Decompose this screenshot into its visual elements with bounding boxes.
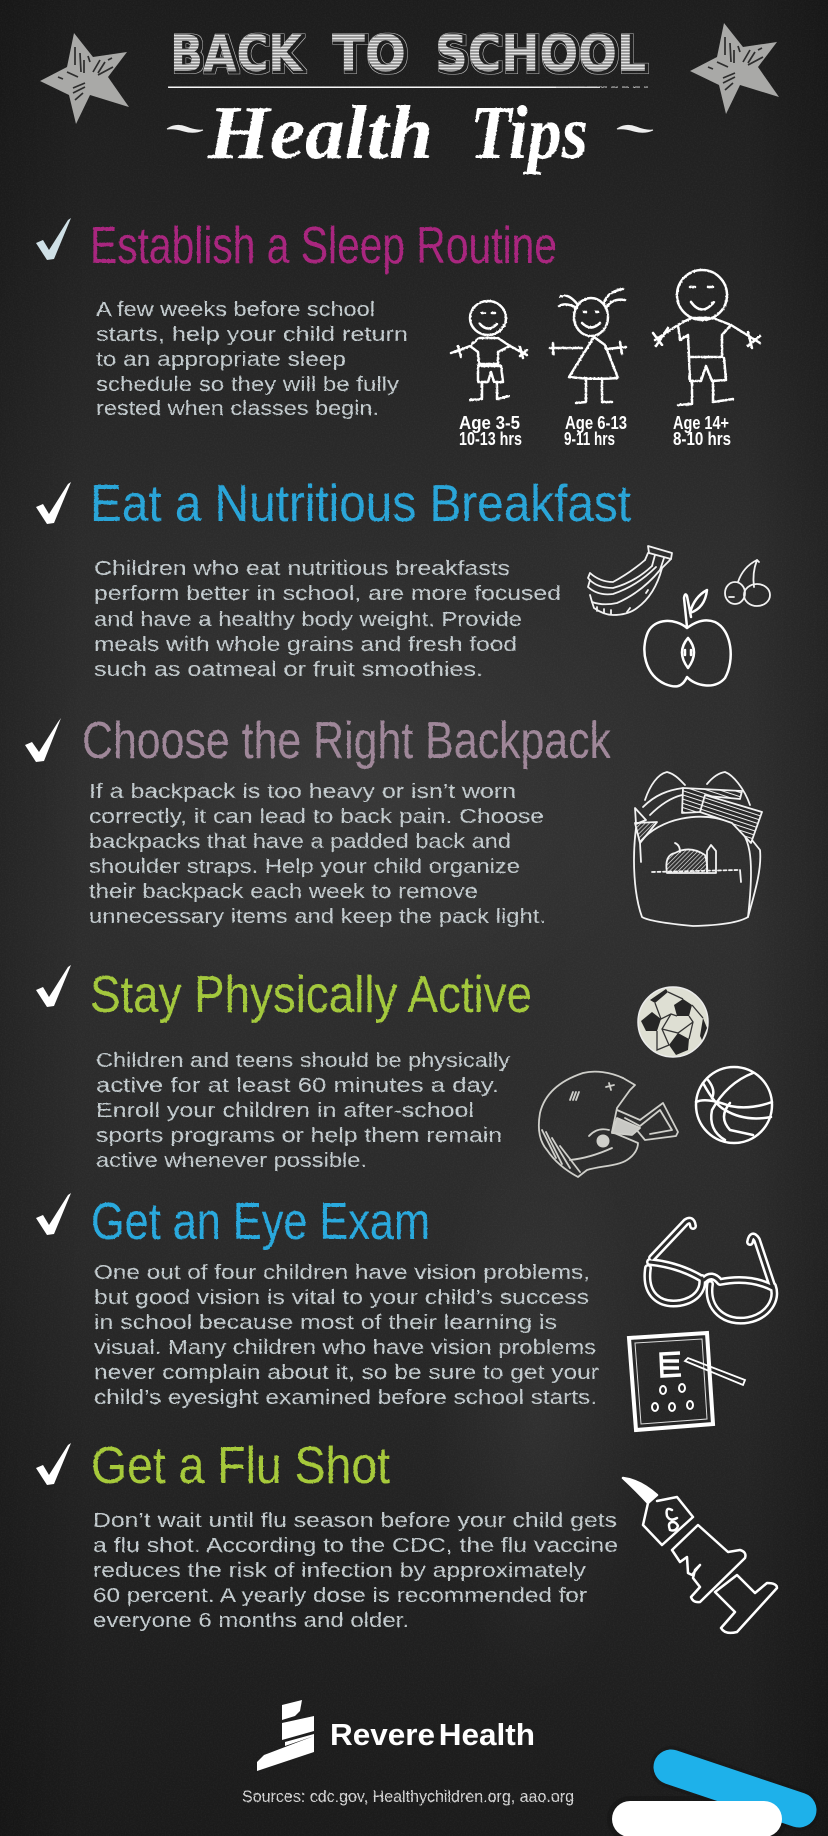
title: back to school: SCHOOL [435,25,646,83]
body text [89,781,546,928]
body text: to an appropriate sleep [96,349,346,371]
icon: football helmet [539,1072,678,1177]
body text: Enroll your children in after-school [96,1100,474,1122]
body text: Children and teens should be physically [96,1050,510,1072]
icon: glasses [647,1221,774,1321]
icon: small boy [451,301,527,400]
icon: cherries [725,560,770,606]
heading: choose the right backpack: Choose the Right Backpack [82,712,612,770]
icon: logo mark [257,1700,314,1771]
body text: active whenever possible. [96,1150,367,1172]
body text: such as oatmeal or fruit smoothies. [94,659,483,681]
age labels: 10-13 hrs [459,429,522,449]
body text: 60 percent. A yearly dose is recommended for [93,1585,587,1607]
body text: visual. Many children who have vision problems [94,1337,596,1359]
body text: meals with whole grains and fresh food [94,634,517,656]
heading: eat a nutritious breakfast: Eat a Nutritious Breakfast [90,475,631,533]
body text: Don’t wait until flu season before your child gets [93,1510,617,1532]
heading: establish a sleep routine: Establish a Sleep Routine [90,217,557,275]
age labels: 8-10 hrs [673,429,731,449]
title: health tips [167,91,653,175]
age labels: Age 6-13 [565,413,627,433]
body text: everyone 6 months and older. [93,1610,409,1632]
body text: correctly, it can lead to back pain. Choose [89,806,544,828]
body text: One out of four children have vision problems, [94,1262,590,1284]
icon: syringe [623,1478,777,1633]
icon: check mark [36,965,71,1007]
body text: sports programs or help them remain [96,1125,502,1147]
icon: bananas [588,546,672,615]
icon: check mark [36,1443,71,1485]
body text [96,299,408,420]
body text: reduces the risk of infection by approximately [93,1560,586,1582]
header [40,23,779,175]
panel: physically active [36,965,772,1177]
body text: their backpack each week to remove [89,881,478,903]
body text: perform better in school, are more focused [94,583,561,605]
brand name: Revere Health [330,1717,535,1752]
icon: check mark [36,218,71,260]
body text: and have a healthy body weight. Provide [94,609,522,631]
age labels: Age 14+ [673,413,729,433]
body text: in school because most of their learning is [94,1312,557,1334]
body text: rested when classes begin. [96,398,379,420]
title: health tips: Health [207,91,433,175]
body text: unnecessary items and keep the pack light. [89,906,546,928]
title: back to school [170,25,646,83]
icon: check mark [25,718,61,762]
title: back to school: TO [332,25,406,83]
panel: flu shot [36,1437,777,1633]
body text: If a backpack is too heavy or isn’t worn [89,781,516,803]
body text: but good vision is vital to your child’s success [94,1287,589,1309]
logo: revere health [257,1700,535,1771]
icon: right star [690,23,779,114]
body text: never complain about it, so be sure to get your [94,1362,599,1384]
title underline [170,85,648,90]
icon: backpack [634,772,762,926]
icon: apple [644,590,731,686]
body text: schedule so they will be fully [96,374,399,396]
icon: left star [40,33,129,124]
age labels: Age 3-5 [459,413,520,433]
panel: right backpack [25,712,762,928]
body text [93,1510,618,1632]
heading: get a flu shot: Get a Flu Shot [91,1437,390,1495]
age labels: 9-11 hrs [564,429,615,449]
body text [94,1262,599,1409]
sources: Sources: cdc.gov, Healthychildren.org, aao.org [242,1787,574,1806]
icon: basketball [696,1067,772,1143]
title: back to school: BACK [170,25,304,83]
icon: older boy [653,270,760,405]
icon: eye chart [629,1333,745,1430]
icon: check mark [36,482,71,524]
title: health tips: Tips [470,91,588,175]
panel: nutritious breakfast [36,475,770,686]
icon: check mark [36,1193,71,1235]
body text: starts, help your child return [96,324,408,346]
heading: get an eye exam: Get an Eye Exam [91,1193,430,1251]
age labels [459,413,731,449]
bandage graphic [607,1767,799,1836]
body text [94,558,561,681]
heading: stay physically active: Stay Physically Active [90,966,532,1024]
body text: backpacks that have a padded back and [89,831,511,853]
panel: eye exam [36,1193,774,1430]
panel: sleep routine [36,217,760,449]
body text: Children who eat nutritious breakfasts [94,558,510,580]
icon: soccer ball [638,987,708,1057]
body text: shoulder straps. Help your child organize [89,856,520,878]
body text: A few weeks before school [96,299,375,321]
body text [96,1050,510,1172]
body text: a flu shot. According to the CDC, the flu vaccine [93,1535,618,1557]
body text: child’s eyesight examined before school starts. [94,1387,597,1409]
body text: active for at least 60 minutes a day. [96,1075,499,1097]
icon: girl [550,289,626,403]
